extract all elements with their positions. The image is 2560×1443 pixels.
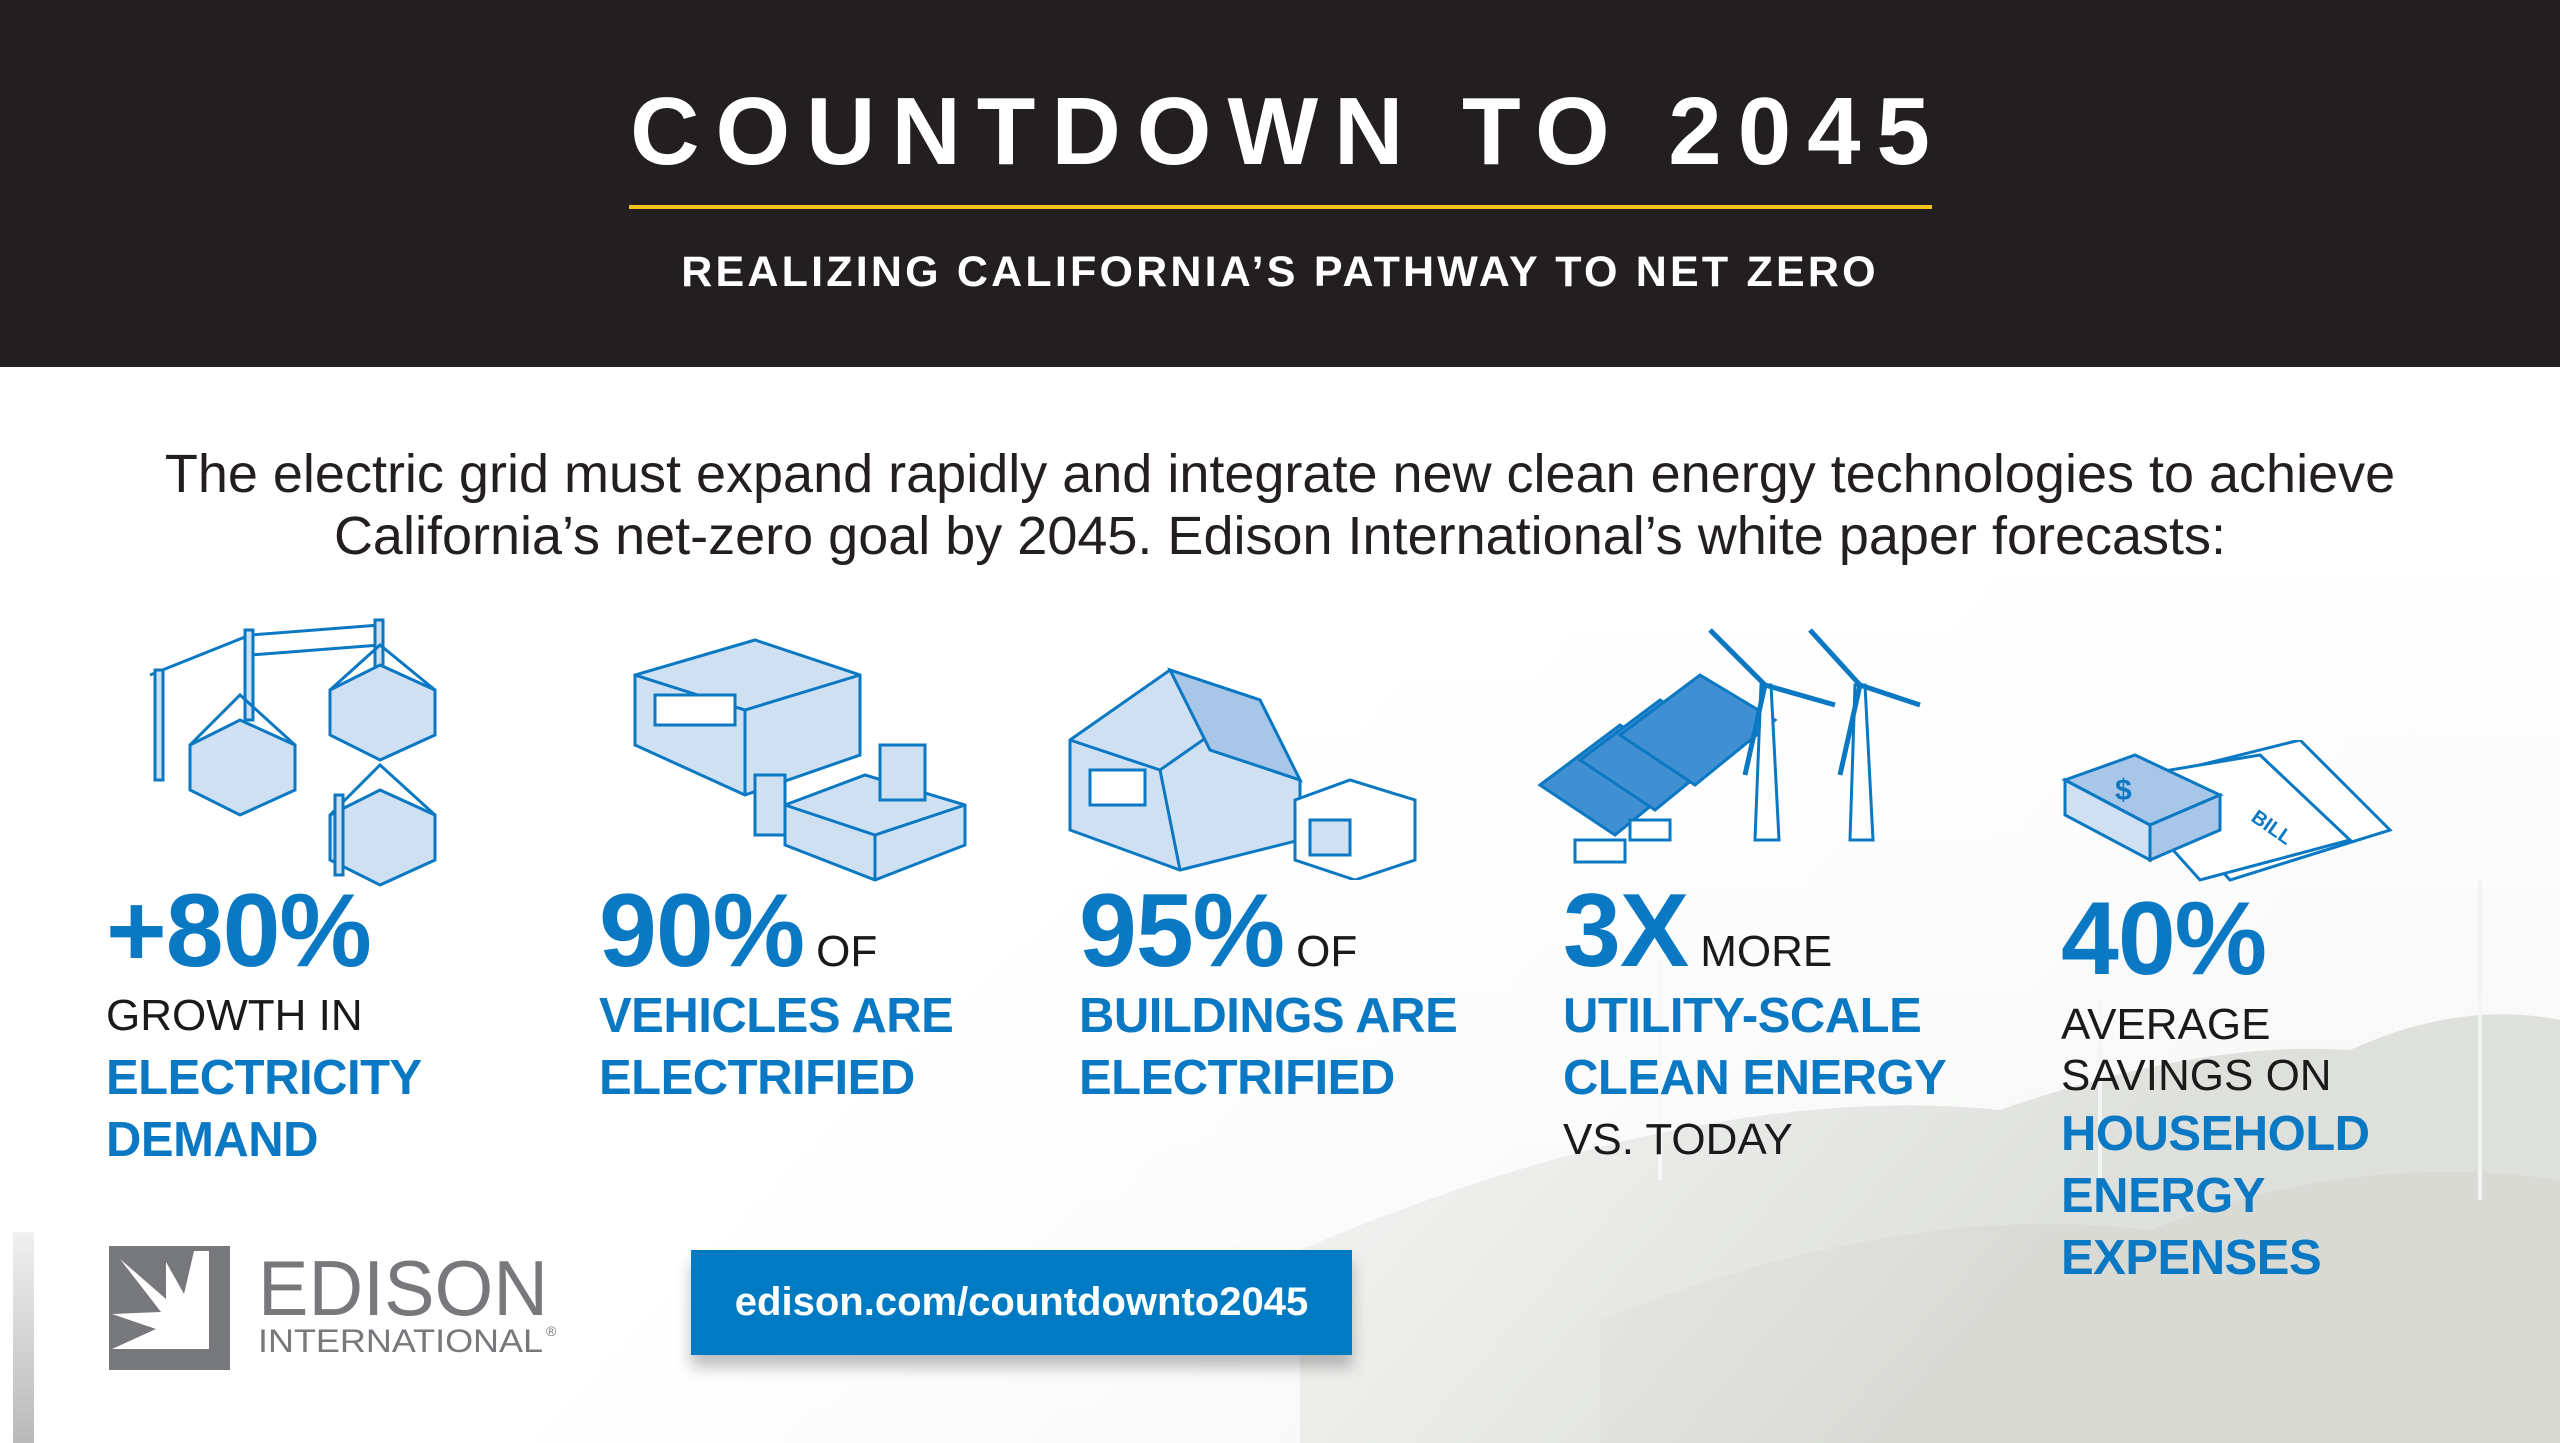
stat: household savings: ENERGY (2061, 1169, 2265, 1223)
stat: vehicles: ELECTRIFIED (599, 1051, 915, 1105)
button: url (691, 1250, 1352, 1355)
stat: household savings (2061, 881, 2370, 1285)
logo: Edison International: INTERNATIONAL (258, 1323, 543, 1359)
stat: electricity demand: DEMAND (106, 1113, 318, 1167)
logo: Edison International (109, 1244, 557, 1370)
logo: Edison International: EDISON (258, 1244, 548, 1332)
stat: clean energy: 3X MORE (1563, 873, 1832, 989)
icon: house with solar and oven (1068, 667, 1416, 880)
stat: clean energy: UTILITY-SCALE (1563, 989, 1921, 1043)
stat: vehicles: VEHICLES ARE (599, 989, 953, 1043)
stat: buildings: ELECTRIFIED (1079, 1051, 1395, 1105)
stat: electricity demand: +80% (106, 873, 371, 989)
icon: solar panels and wind turbines (1538, 628, 1921, 864)
stat: clean energy: CLEAN ENERGY (1563, 1051, 1946, 1105)
stat: electricity demand: GROWTH IN (106, 991, 363, 1040)
stat: household savings: AVERAGE (2061, 1000, 2270, 1049)
stat: household savings: SAVINGS ON (2061, 1051, 2332, 1100)
stat: vehicles (599, 873, 953, 1105)
header band (0, 0, 2560, 367)
stat: electricity demand: ELECTRICITY (106, 1051, 422, 1105)
logo: Edison International: ® (546, 1323, 557, 1339)
stat: household savings: HOUSEHOLD (2061, 1107, 2370, 1161)
stat: household savings: 40% (2061, 881, 2266, 997)
intro text: California’s net-zero goal by 2045. Edison International’s white paper forecasts: (334, 506, 2226, 566)
icon: houses with power lines (150, 618, 436, 887)
subtitle: REALIZING CALIFORNIA’S PATHWAY TO NET ZERO (681, 248, 1879, 296)
stat: electricity demand (106, 873, 422, 1167)
button: url: edison.com/countdownto2045 (735, 1280, 1308, 1324)
icon: cash and bill (2061, 740, 2393, 882)
stat: buildings: BUILDINGS ARE (1079, 989, 1457, 1043)
intro text (165, 444, 2395, 566)
icon: cash and bill: $ (2115, 774, 2132, 807)
stat: vehicles: 90% OF (599, 873, 877, 989)
stat: clean energy: VS. TODAY (1563, 1115, 1793, 1164)
title: COUNTDOWN TO 2045 (630, 78, 1946, 185)
intro text: The electric grid must expand rapidly and integrate new clean energy technologies to achieve (165, 444, 2395, 504)
stat: household savings: EXPENSES (2061, 1231, 2321, 1285)
icon: cash and bill: BILL (2247, 806, 2296, 850)
stat: buildings (1079, 873, 1457, 1105)
icon: bus and truck charging (634, 638, 966, 882)
stat: buildings: 95% OF (1079, 873, 1357, 989)
stat: clean energy (1563, 873, 1946, 1164)
yellow rule (629, 205, 1932, 209)
